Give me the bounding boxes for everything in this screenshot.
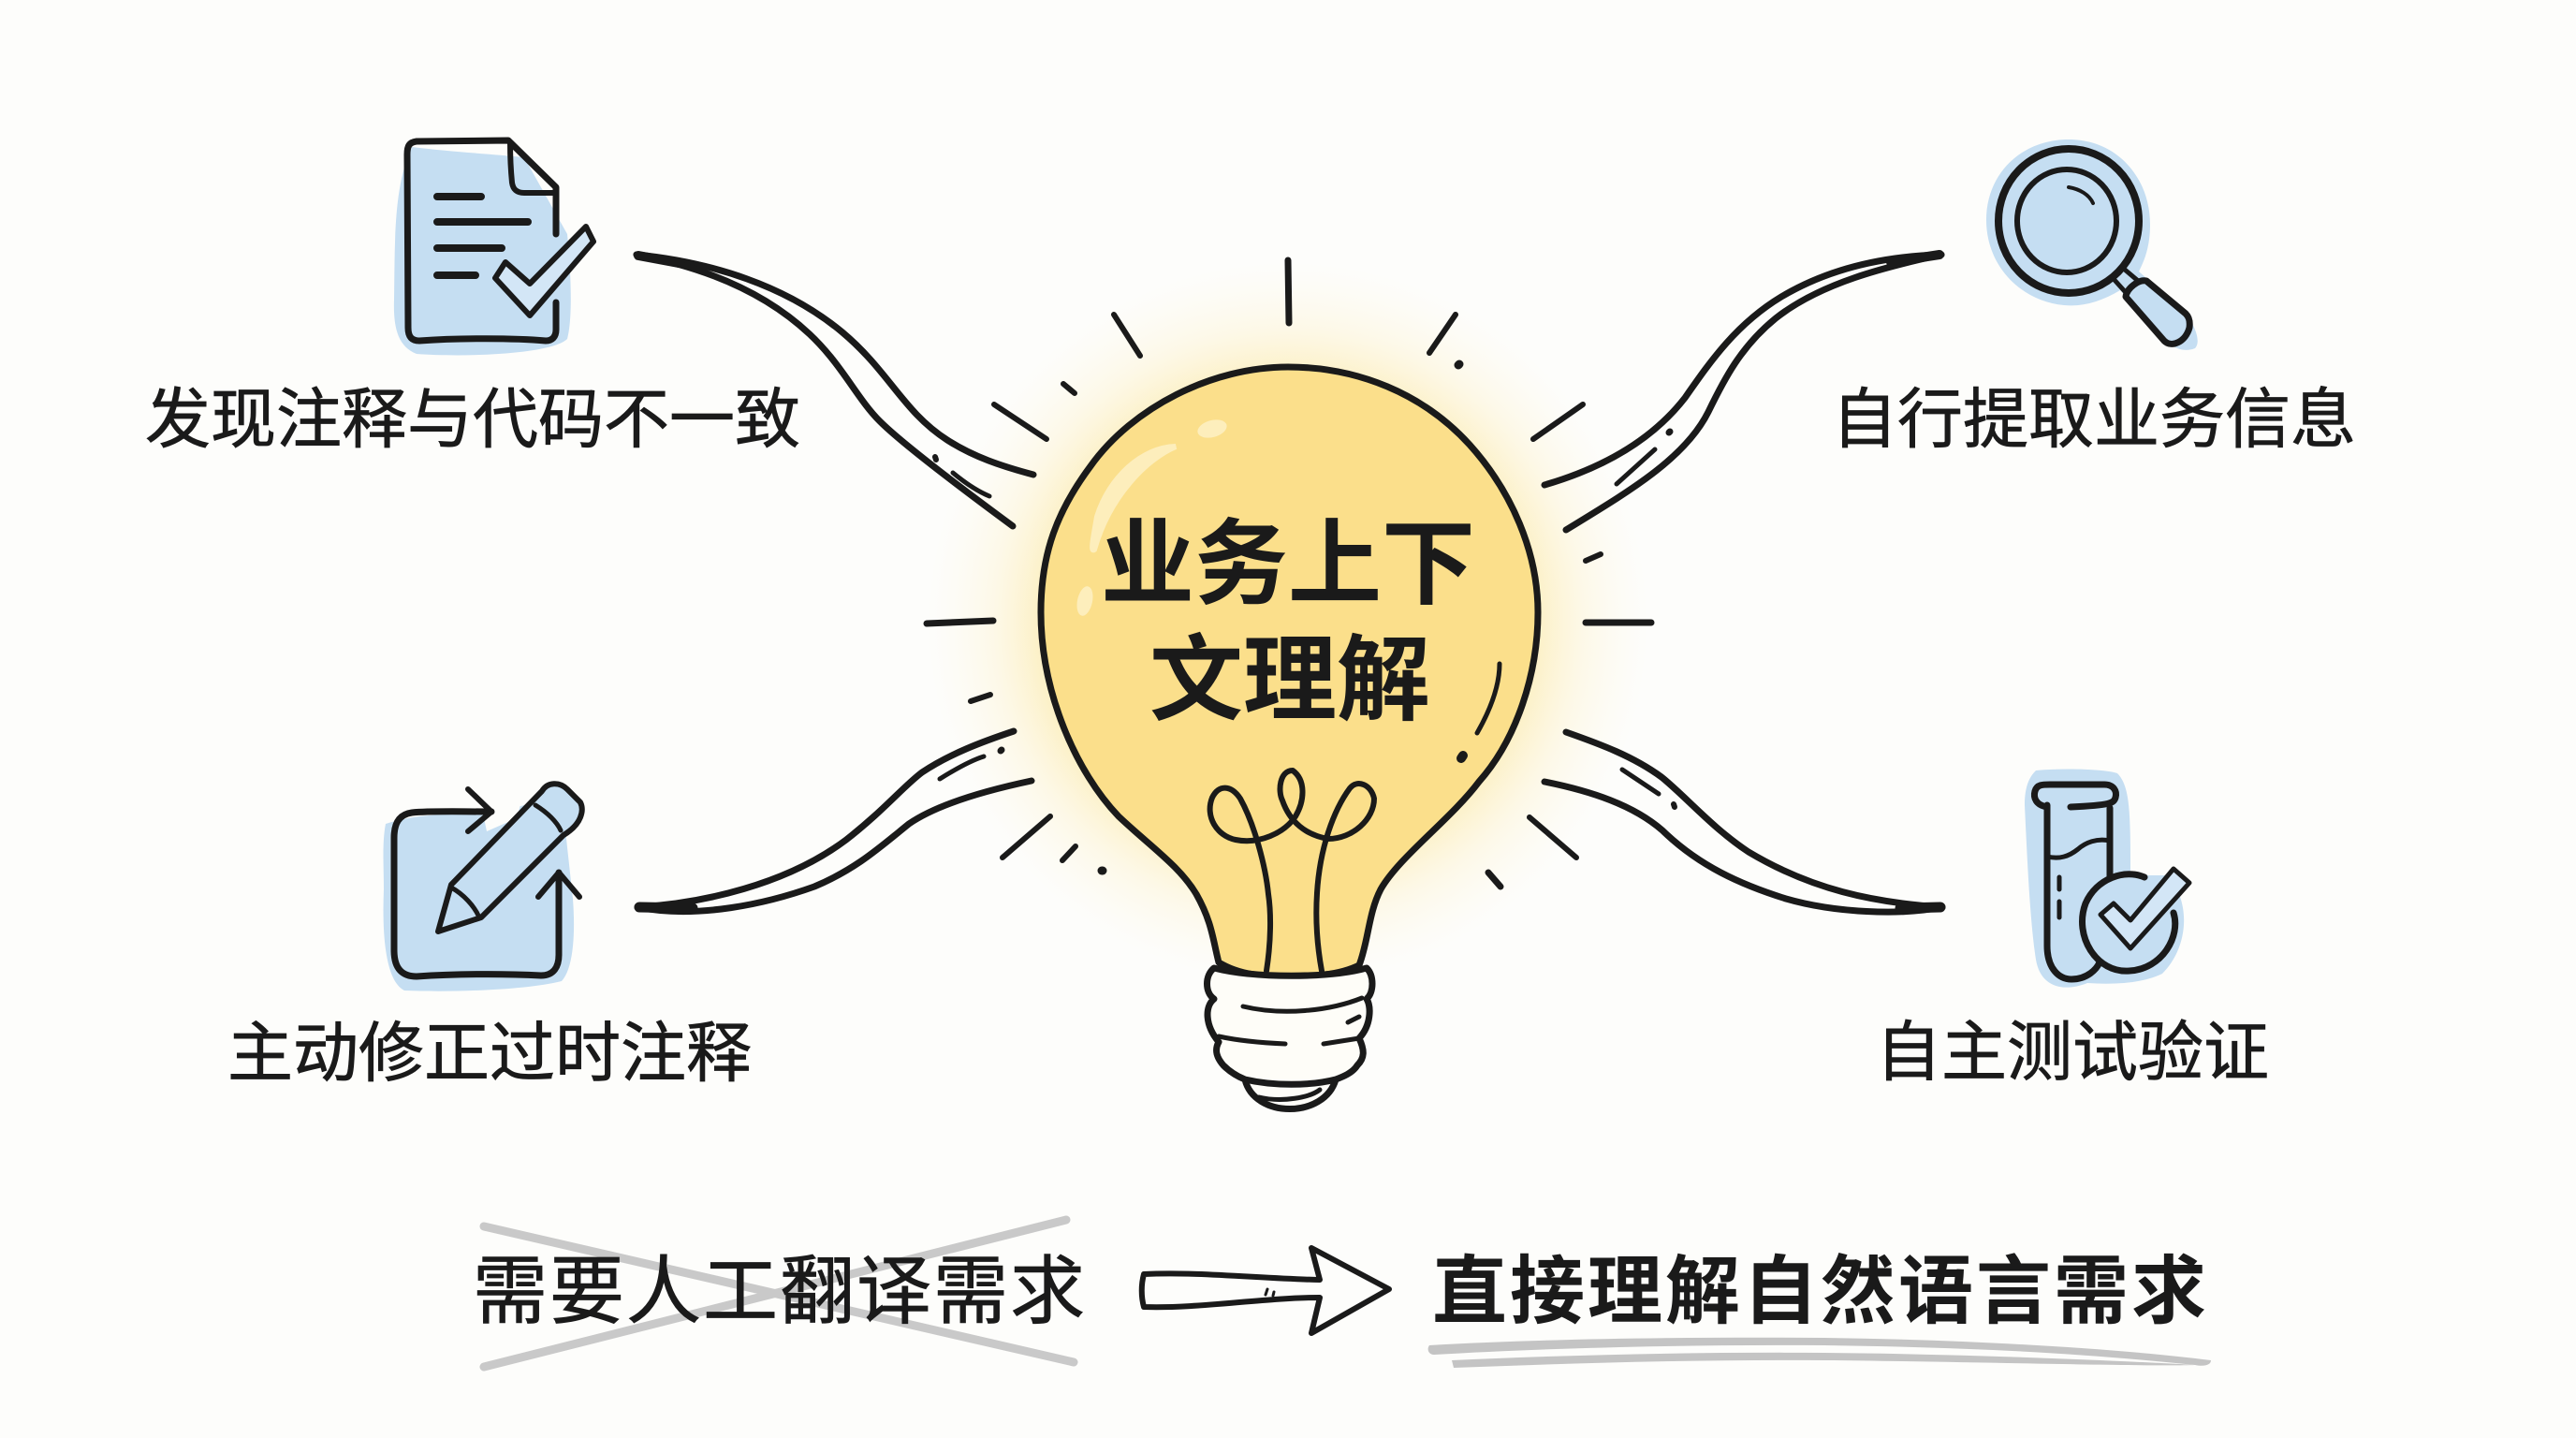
bulb glass (1041, 367, 1538, 976)
title: 文理解 (1149, 628, 1430, 733)
connector: bottom right (1544, 732, 1942, 912)
icon: magnifying glass (1986, 139, 2198, 350)
icon: document with checkmark (394, 140, 593, 355)
title: 业务上下 (1101, 512, 1475, 617)
new approach: bold text with underline: 直接理解自然语言需求 (1432, 1250, 2209, 1333)
screw base (1208, 968, 1372, 1108)
central light bulb (1041, 367, 1538, 1108)
connector: top right (1544, 255, 1941, 530)
connector: bottom left (637, 731, 1032, 912)
glow behind bulb (928, 262, 1648, 983)
light rays (927, 260, 1651, 887)
label: bottom left: 主动修正过时注释 (227, 1017, 752, 1090)
bulb highlights (1075, 417, 1229, 617)
icon: pencil editing square (384, 784, 582, 991)
label: top right: 自行提取业务信息 (1832, 383, 2356, 456)
old approach: crossed out text (473, 1220, 1087, 1367)
label: bottom right: 自主测试验证 (1876, 1016, 2269, 1089)
old approach: crossed out text: 需要人工翻译需求 (473, 1250, 1087, 1333)
arrow (1142, 1248, 1389, 1333)
label: top left: 发现注释与代码不一致 (145, 383, 800, 456)
icon: test tube with check (2025, 770, 2189, 988)
title (1101, 512, 1475, 733)
filament (1210, 770, 1374, 971)
bulb reflections (1461, 664, 1500, 758)
connector: top left (637, 255, 1033, 526)
